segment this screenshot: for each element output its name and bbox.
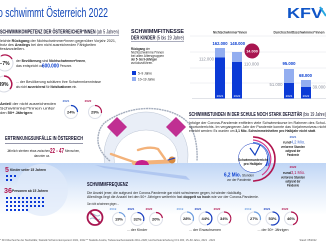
donuts: seniors: 46% bbox=[287, 216, 295, 221]
panel: swimming fitness of children: 5–9 Jahre bbox=[138, 72, 152, 76]
swimmer bbox=[111, 148, 176, 165]
frequency text: Die Anzahl jener, die aufgrund der Corona-Pandemie gar nicht schwimmen gegen, ist wieder rückläufig. bbox=[87, 191, 242, 195]
stat: children drowned: 5 bbox=[5, 167, 9, 174]
panel: school swimming lessons: rund bbox=[283, 140, 291, 144]
donuts: adults: 2022 bbox=[214, 207, 221, 211]
panel: school swimming lessons: rund bbox=[283, 171, 291, 175]
bar value labels: 162.000 bbox=[212, 41, 228, 46]
heading: competence: SCHWIMMKOMPETENZ DER ÖSTERREICHER*INNEN (ab 5 Jahren) bbox=[0, 28, 119, 36]
panel: school swimming lessons: pro Halbjahr bbox=[244, 162, 263, 166]
panel: drowning accidents: Personen ab 15 Jahren bbox=[12, 189, 48, 193]
bar: average swimmers 2021 bbox=[284, 69, 294, 83]
panel: swimming frequency: Gar nicht schwimmen gingen ... bbox=[87, 202, 119, 206]
panel: school swimming lessons: vor der Pandemie bbox=[227, 178, 251, 182]
panel: drowning accidents: Kinder unter 15 Jahren bbox=[10, 168, 46, 172]
fitness text: Rückgang der bbox=[131, 47, 151, 51]
panel: school swimming lessons: aufgrund der bbox=[286, 180, 301, 184]
bar year labels bbox=[217, 94, 310, 98]
panel: school swimming lessons: verlorene Stunden bbox=[281, 145, 305, 149]
bar: non-swimmers 2022 bbox=[232, 52, 242, 62]
donuts: seniors: ... der 50+ Jährigen bbox=[257, 228, 289, 232]
panel: swimming competence: Personen. bbox=[60, 64, 72, 68]
donuts: adults: 44% bbox=[201, 216, 210, 221]
panel: swimming competence: 24% bbox=[67, 110, 75, 114]
panel: swimming competence: der Bevölkerung sind Nichtschwimmer*innen, bbox=[16, 59, 86, 63]
panel: drowning accidents: darunter ca. bbox=[34, 154, 50, 158]
panel: swimming competence: ... der Bevölkerung schätzen ihre Schwimmkenntnisse bbox=[16, 80, 101, 84]
heading: fitness: SCHWIMMFITNESSE bbox=[131, 29, 185, 35]
heading: frequency: SCHWIMMFREQUENZ bbox=[87, 182, 128, 188]
panel: swimming competence: festzustellen. bbox=[0, 47, 25, 51]
bar chart: swimmers by age: 68.000 bbox=[299, 73, 313, 78]
donuts: seniors: 53% bbox=[268, 216, 277, 221]
bar chart: swimmers by age: 95.000 bbox=[282, 61, 296, 66]
panel: drowning accidents: Menschen, bbox=[65, 149, 80, 153]
panel: school swimming lessons: 4,2 Mio. bbox=[291, 140, 305, 144]
panel: swimming fitness of children: bei allen Altersgruppen bbox=[131, 54, 164, 58]
panel: school swimming lessons: sportunterrichts. Im vergangenen Jahr der Pandemie konnte das Vorjahresniveau nicht bbox=[189, 125, 326, 129]
donuts: children: 32% bbox=[133, 216, 142, 222]
donuts: adults: 28% bbox=[183, 216, 191, 221]
bar year labels: 2022 bbox=[234, 94, 241, 98]
bar chart: swimmers by age: 112.000 bbox=[199, 56, 215, 62]
pictogram: adults bbox=[6, 197, 44, 211]
panel: swimming competence: Schwimmer*innen unter bbox=[0, 106, 56, 110]
chart headers: Nichtschwimmer*innen bbox=[213, 30, 248, 34]
icon: no swimming bbox=[88, 210, 102, 225]
title: o schwimmt Österreich 2022 bbox=[0, 6, 108, 20]
footer: sources: * KFV-Recherche der Sterbefälle; Statistik Schwimmkompetenz 2021, 2022 ** Statistik Austria, Todesursachenstatistik 2011–2020; Hochschule Erhebung N=1.000, 15–60 Jahre, 2021 · 2022 bbox=[0, 238, 216, 242]
footer: sources bbox=[0, 238, 317, 242]
bar chart: swimmers by age: 51.000 bbox=[270, 82, 283, 87]
donuts: adults bbox=[177, 207, 231, 232]
panel: school swimming lessons: verlorene Stunden bbox=[281, 176, 305, 180]
bar year labels: 2021 bbox=[217, 94, 224, 98]
donuts: seniors: 2019 bbox=[245, 207, 252, 211]
footer: sources: Stand: 05/2022 bbox=[300, 238, 317, 242]
donut: 2022 29 percent: 2022 bbox=[85, 99, 92, 103]
donut: minus 7 percent bbox=[0, 55, 13, 71]
panel: swimming competence: 600.000 bbox=[42, 64, 59, 70]
lifebuoy rope bbox=[98, 108, 197, 161]
lifebuoy strap right bbox=[166, 117, 186, 137]
panel: drowning accidents bbox=[4, 135, 83, 211]
panel: school swimming lessons: aufgrund der bbox=[286, 149, 301, 153]
donuts: adults: ... der Erwachsenen bbox=[189, 228, 221, 232]
panel: swimming competence: als nicht ausreichend für Notsituationen ein. bbox=[16, 85, 77, 89]
panel: swimming fitness of children: der 5- bis 9-Jährigen bbox=[131, 58, 157, 62]
water background bbox=[0, 163, 326, 216]
stat: 2022 hours lost: 2022 bbox=[290, 165, 297, 169]
bar year labels: 2021 bbox=[286, 94, 293, 98]
donuts: children: ... der Kinder bbox=[127, 228, 148, 232]
panel: school swimming lessons: Pandemie bbox=[287, 184, 299, 188]
donuts: children: 2021 bbox=[128, 207, 135, 211]
donuts: children bbox=[110, 207, 162, 232]
panel: swimming competence: das entspricht ca. bbox=[16, 64, 44, 68]
stat: adults drowned: 36 bbox=[4, 188, 12, 195]
logo: KFV: KFV bbox=[287, 6, 323, 22]
donuts: children: 20% bbox=[152, 216, 160, 222]
donuts: seniors bbox=[245, 207, 298, 232]
donuts: seniors: 27% bbox=[250, 216, 258, 221]
donuts: children: 2019 bbox=[110, 207, 117, 211]
panel: school swimming lessons: erreicht werden: Es wurden um 3,1 Mio. Schwimmeinheiten pro Halbjahr nicht statt. bbox=[189, 129, 316, 133]
drowning text: Jährlich sterben etwa zwischen bbox=[7, 149, 50, 153]
panel: swimming fitness of children: 10–19 Jahre bbox=[138, 78, 155, 82]
legend bbox=[132, 71, 136, 75]
panel: swimming competence: den 50+ Jährigen : bbox=[0, 111, 33, 115]
donuts: children: 2022 bbox=[146, 207, 153, 211]
panel: swimming fitness of children bbox=[131, 29, 185, 82]
lifebuoy ring bbox=[104, 112, 188, 163]
panel: school swimming lessons: 3,1 Mio. bbox=[291, 170, 305, 175]
bar chart: swimmers by age: 39.000 bbox=[312, 84, 326, 90]
donut: 2021 24 percent: 2021 bbox=[63, 99, 70, 103]
stat: pre-pandemic hours: 6,2 Mio. bbox=[224, 172, 242, 178]
bar chart: swimmers by age: 110.000 bbox=[244, 62, 260, 66]
note on age group: Anteil der nicht ausreichenden bbox=[0, 102, 56, 106]
panel: school swimming lessons: Stunden bbox=[242, 174, 254, 178]
panel: swimming fitness of children: zurückzuführen. bbox=[131, 61, 153, 65]
bar chart: swimmers by age bbox=[190, 30, 326, 98]
panel: school swimming lessons: Schwimmunterricht bbox=[238, 158, 269, 162]
bar chart: swimmers by age: 148.000 bbox=[230, 41, 246, 46]
bar year labels: 2022 bbox=[303, 94, 310, 98]
donuts: seniors: 2022 bbox=[282, 207, 289, 211]
heading: drowning accidents: ERTRINKUNGSUNFÄLLE IN ÖSTERREICH bbox=[5, 135, 83, 142]
school text: Infolge der Corona-Pandemie entfielen viele Schwimmkurse im Rahmen des Schul- bbox=[189, 121, 326, 125]
panel: drowning accidents: 22 - 47 bbox=[50, 148, 64, 155]
panel: swimming frequency: Allerdings liegt die Anzahl bei den 50+ Jährigen weiterhin fast doppelt so hoch wie vor der Corona-Pandemie. bbox=[87, 195, 259, 199]
donuts: seniors: 2021 bbox=[264, 207, 271, 211]
bar chart: swimmers by age: 14.000 bbox=[246, 50, 258, 54]
panel: swimming competence bbox=[0, 28, 119, 118]
donuts: adults: 34% bbox=[220, 216, 228, 221]
central circle: lessons bbox=[238, 144, 268, 172]
illustration: lifebuoy bbox=[97, 108, 198, 163]
intro text: leichte Rückgang der Nichtschwimmer*innen gegenüber Vorjahr 2021, bbox=[0, 39, 116, 43]
donuts: children: 19% bbox=[115, 216, 123, 222]
panel: school swimming lessons: Pandemie bbox=[287, 153, 299, 157]
panel: swimming frequency bbox=[87, 182, 298, 232]
panel: swimming competence: trotz des Anstiegs bei den nicht ausreichenden Fähigkeiten bbox=[0, 43, 96, 47]
lifebuoy strap left bbox=[107, 117, 127, 137]
stat: 2021 hours lost: 2021 bbox=[290, 135, 297, 139]
panel: school swimming lessons bbox=[189, 111, 326, 188]
panel: swimming fitness of children: Nichtschwimmer*innen bbox=[131, 50, 164, 54]
bar: average swimmers 2022 bbox=[301, 80, 311, 87]
callout: difference bbox=[244, 44, 260, 58]
donuts: adults: 2021 bbox=[195, 207, 202, 211]
donuts: adults: 2019 bbox=[177, 207, 184, 211]
panel: swimming competence: 29% bbox=[91, 110, 99, 114]
panel: swimming fitness of children: DER KINDER (5 bis 19 Jahre) bbox=[131, 36, 184, 42]
bar: non-swimmers 2021 bbox=[215, 48, 225, 58]
arc chart: lessons lost bbox=[253, 137, 275, 181]
pictogram: children bbox=[6, 175, 16, 181]
donut: 39 percent bbox=[0, 76, 12, 92]
